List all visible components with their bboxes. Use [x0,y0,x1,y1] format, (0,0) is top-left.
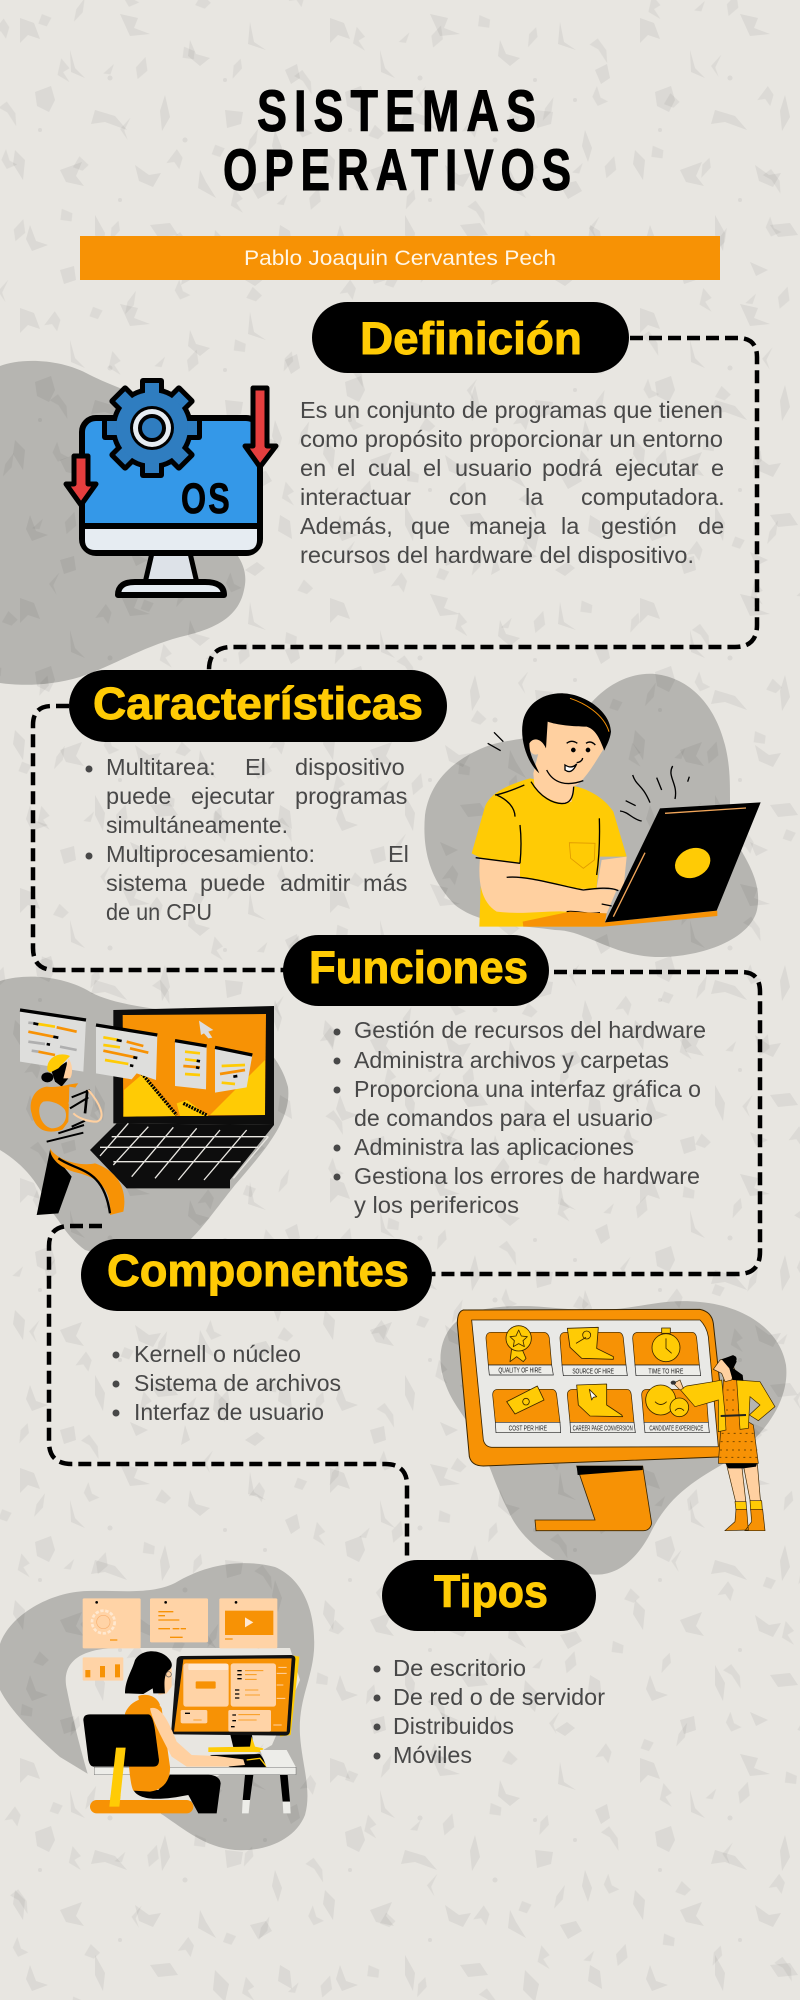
monitor lower band [85,527,257,550]
text: definition paragraph: con [449,484,487,510]
blob: functions background [0,977,288,1254]
icon: OS monitor [66,378,276,595]
title: SISTEMAS [257,79,543,144]
text: characteristics list: admitir [280,870,351,896]
cursor [199,1021,213,1038]
kiosk stand [535,1466,652,1531]
arms [479,858,617,913]
illustration: person at desktop computer [83,1598,299,1813]
text: functions list: Administra archivos y carpetas [354,1047,669,1073]
text: definition paragraph: el [423,455,441,481]
dashboard cards [486,1332,708,1422]
text: types list: Distribuidos [393,1713,514,1739]
text: functions list: de comandos para el usuario [354,1105,653,1131]
text: definition paragraph: gestión [601,513,677,539]
text: definition paragraph [300,397,725,568]
person face and hair [158,1667,172,1695]
connector: components to types [49,1226,407,1560]
blob: light inner area of the types background [66,1648,300,1835]
arrow: small red [66,456,96,505]
presenter [671,1355,775,1531]
monitor [280,1655,299,1737]
person arm [150,1708,245,1767]
face details [476,741,618,913]
text: definition paragraph: la [561,513,580,539]
face and neck [533,722,605,803]
heading: Características [69,670,447,742]
card labels: CANDIDATE EXPERIENCE [649,1425,704,1432]
card labels: COST PER HIRE [509,1425,547,1432]
card labels: SOURCE OF HIRE [572,1368,614,1375]
connector: functions to components [432,972,760,1274]
text: components list: Sistema de archivos [134,1370,341,1396]
text: characteristics list: más [363,870,407,896]
illustration: woman with laptop [20,1006,274,1215]
title: OPERATIVOS [223,138,578,203]
keyboard and mouse [210,1754,269,1767]
chair base [90,1800,193,1813]
text: definition paragraph: maneja [469,513,547,539]
text: characteristics list: puede [106,783,171,809]
heading: Tipos [382,1560,596,1631]
card labels: CAREER PAGE CONVERSION [573,1426,633,1433]
text: types list: De red o de servidor [393,1684,605,1710]
text: characteristics list: de un CPU [106,899,212,925]
text: types list: De escritorio [393,1655,526,1681]
shirt pocket [569,843,595,868]
card labels [498,1368,704,1433]
text: components list [112,1341,341,1425]
text: characteristics list: Multitarea: [106,754,216,780]
heading: Características: Características [93,678,423,729]
motion marks [488,732,689,821]
blob: types background [0,1563,314,1850]
hair [522,693,611,773]
card labels: TIME TO HIRE [648,1368,684,1375]
text: definition paragraph: que [411,513,450,539]
text: characteristics list: ejecutar [191,783,275,809]
text: characteristics list [86,754,409,925]
woman figure [31,1054,124,1215]
text: definition paragraph: como propósito proporcionar un entorno [300,426,723,452]
text: definition paragraph: Es un conjunto de programas que tienen [300,397,723,423]
laptop lid [605,802,761,922]
title [223,79,578,203]
text: definition paragraph: e [711,455,724,481]
text: definition paragraph: computadora. [581,484,725,510]
chair post [109,1748,126,1807]
table legs [243,1775,290,1802]
text: characteristics list: simultáneamente. [106,812,288,838]
monitor base [118,582,224,595]
illustration: dashboard kiosk with presenter [457,1309,775,1531]
illustration: man with laptop [472,693,761,927]
wall panels [83,1598,277,1681]
keyboard [90,1123,274,1188]
blob: characteristics background [424,674,758,957]
text: functions list: Gestiona los errores de hardware [354,1163,700,1189]
card icons [506,1326,689,1417]
person pants [133,1775,221,1813]
arrow: large red [245,388,276,467]
heading: Definición: Definición [360,313,582,364]
text: definition paragraph: ejecutar [615,455,699,481]
text: characteristics list: El [388,841,409,867]
text: definition paragraph: podrá [542,455,603,481]
author banner [80,236,720,280]
text: definition paragraph: en [300,455,326,481]
blob: definition background [0,361,245,685]
text: characteristics list: dispositivo [295,754,405,780]
text: components list: Interfaz de usuario [134,1399,324,1425]
heading: Funciones: Funciones [309,942,528,993]
text: definition paragraph: recursos del hardware del dispositivo. [300,542,694,568]
author banner: Pablo Joaquin Cervantes Pech [244,246,556,270]
shirt [472,778,627,927]
text: definition paragraph: cual [368,455,411,481]
table [260,1750,296,1767]
text: characteristics list: programas [295,783,407,809]
bar chart [85,1664,120,1677]
kiosk body [457,1309,728,1466]
heading: Tipos: Tipos [434,1566,548,1617]
text: characteristics list: puede [200,870,265,896]
chair back [83,1714,159,1767]
heading: Definición [312,302,629,373]
text: functions list [334,1017,706,1218]
heading: Funciones [283,935,549,1006]
text: functions list: Proporciona una interfaz gráfica o [354,1076,701,1102]
heading: Componentes: Componentes [107,1245,409,1296]
text: characteristics list: El [245,754,266,780]
floating windows [20,1010,252,1093]
text: functions list: y los perifericos [354,1192,519,1218]
person shirt [125,1699,170,1792]
text: components list: Kernell o núcleo [134,1341,301,1367]
text: definition paragraph: interactuar [300,484,411,510]
text: definition paragraph: la [525,484,544,510]
heading: Componentes [81,1239,432,1311]
laptop screen [113,1006,274,1125]
text: OS: OS [181,475,232,523]
monitor stand [145,553,197,583]
text: functions list: Administra las aplicaciones [354,1134,634,1160]
text: types list [374,1655,605,1768]
text: definition paragraph: el [337,455,355,481]
text: definition paragraph: usuario [455,455,532,481]
connector: characteristics to functions [33,706,284,970]
text: characteristics list: sistema [106,870,188,896]
kiosk screen [472,1320,718,1447]
connector: definition to characteristics [209,338,757,670]
laptop base [523,911,717,927]
text: characteristics list: Multiprocesamiento: [106,841,315,867]
text: functions list: Gestión de recursos del hardware [354,1017,706,1043]
card labels: QUALITY OF HIRE [498,1368,542,1375]
blob: components background [440,1301,786,1575]
monitor screen [82,418,260,553]
text: definition paragraph: de [698,513,724,539]
text: types list: Móviles [393,1742,472,1768]
icon: gear [102,378,202,478]
text: definition paragraph: Además, [300,513,393,539]
